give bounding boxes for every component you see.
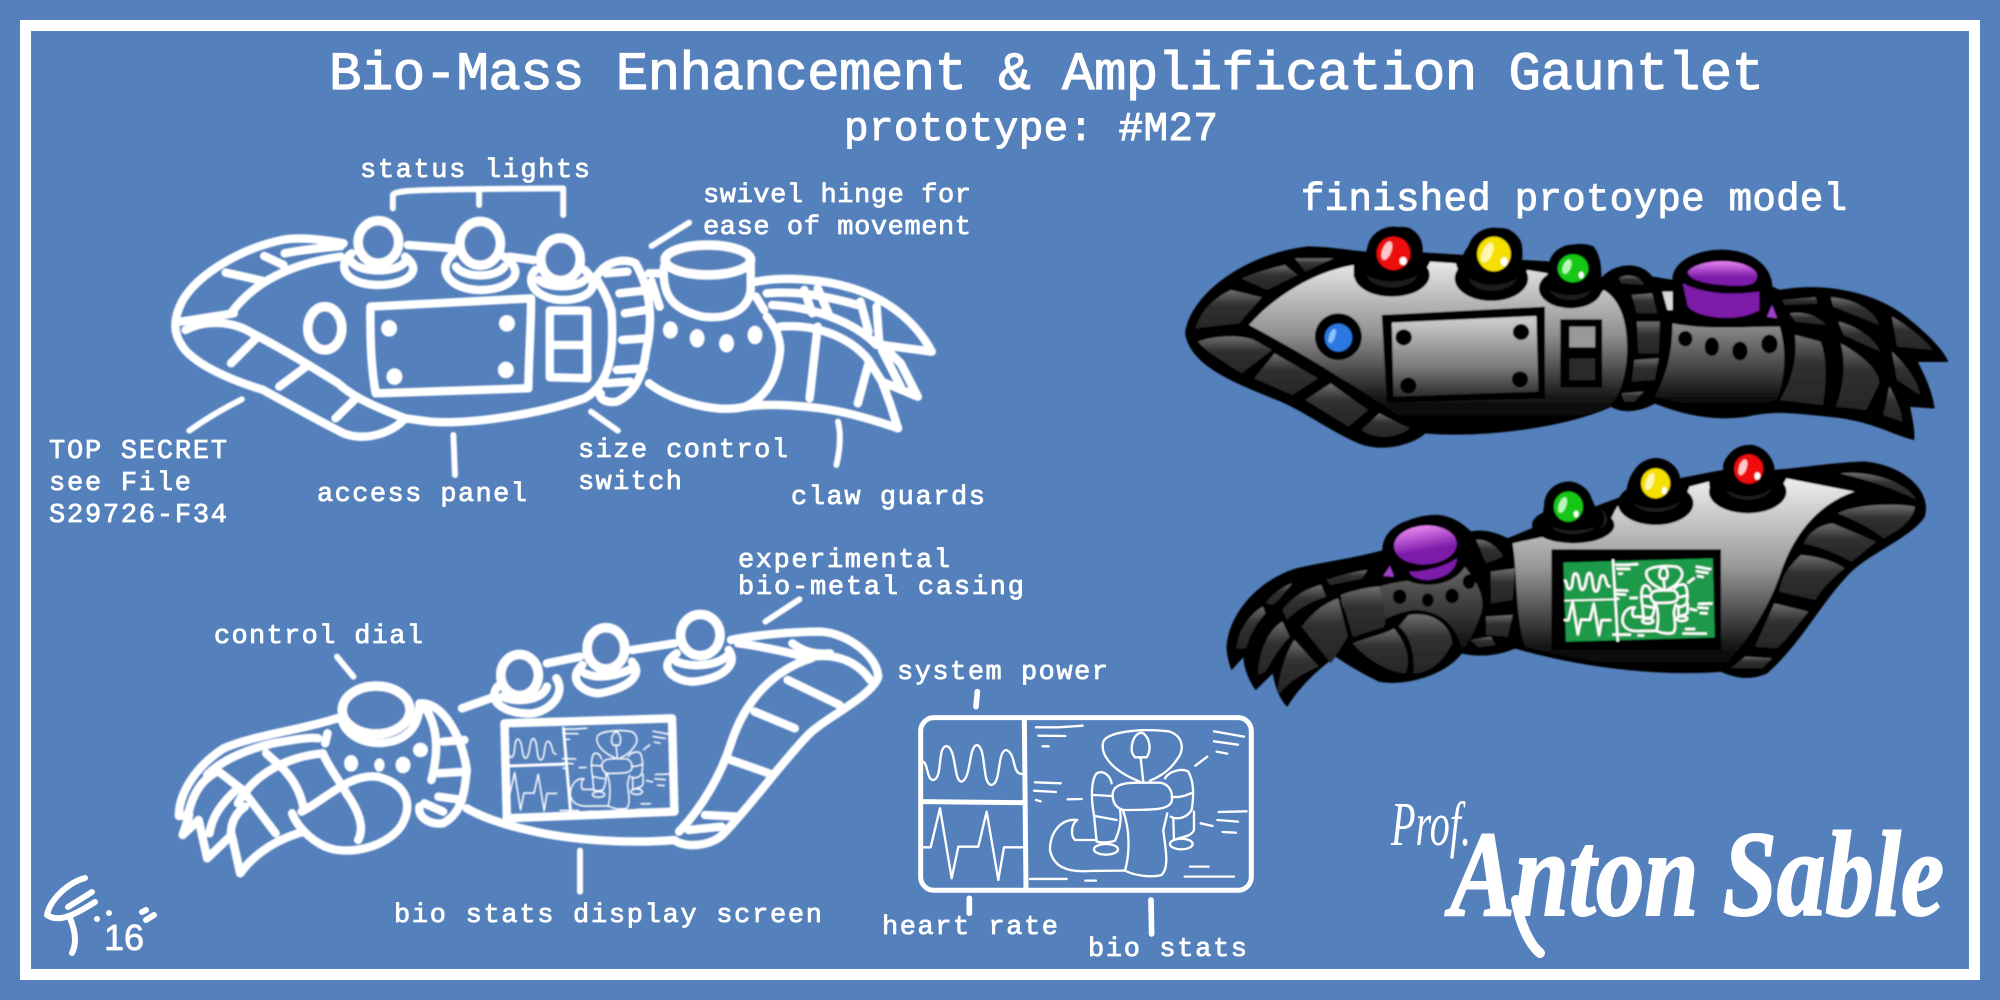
green light xyxy=(1558,254,1588,282)
light bases xyxy=(1532,445,1786,543)
artist mark '16: 16 xyxy=(104,917,144,958)
label: size control switch xyxy=(578,436,788,498)
yellow light xyxy=(1477,237,1511,271)
label: status lights: status lights xyxy=(360,156,590,186)
black silhouette xyxy=(1185,227,1948,447)
casing outline xyxy=(462,632,878,845)
bio stats screen xyxy=(504,718,674,818)
status light 2 xyxy=(576,628,636,693)
metal body xyxy=(1249,262,1627,432)
label: swivel hinge: swivel hinge for xyxy=(703,181,971,211)
status light 3 xyxy=(531,238,593,300)
forearm and fist xyxy=(1341,563,1482,673)
purple control dial xyxy=(1372,512,1479,591)
label: size control switch: size control xyxy=(578,436,788,466)
claw guards xyxy=(179,718,346,873)
claw plates xyxy=(1236,570,1385,693)
access panel xyxy=(370,298,531,393)
status light 3 xyxy=(667,614,732,682)
label: top secret: see File xyxy=(49,469,191,499)
metal body xyxy=(1513,478,1854,669)
screen detail diagram xyxy=(921,692,1251,934)
size control switch xyxy=(550,311,587,378)
leaders xyxy=(969,692,1152,934)
label: bio-metal casing: experimental xyxy=(738,546,950,576)
heading: finished prototype model: finished protoype model xyxy=(1301,178,1847,222)
leader lines xyxy=(189,188,840,475)
round port xyxy=(308,307,342,350)
label: bio stats: bio stats xyxy=(1088,935,1247,965)
label: top secret: TOP SECRET xyxy=(49,437,227,467)
artist mark '16 xyxy=(47,878,154,958)
control dial xyxy=(664,245,751,317)
purple control dial xyxy=(1673,250,1777,326)
blueprint sketch: gauntlet side B xyxy=(179,599,878,892)
signature: Prof. Anton Sable: Prof. xyxy=(1390,791,1471,859)
claw plates xyxy=(1780,297,1933,422)
yellow light xyxy=(1641,468,1670,498)
label: heart rate: heart rate xyxy=(882,913,1058,943)
access panel xyxy=(1382,307,1545,403)
dial dots xyxy=(344,743,428,773)
label: swivel hinge xyxy=(703,181,971,243)
status light 1 xyxy=(344,221,413,285)
tail armour plates xyxy=(1731,473,1916,668)
tail band dividers xyxy=(180,246,354,418)
blueprint sketch: gauntlet side A xyxy=(175,188,932,475)
fist guard xyxy=(292,776,407,851)
hinge ring xyxy=(419,703,467,824)
control dial xyxy=(342,686,420,743)
label: system power: system power xyxy=(897,658,1108,688)
green screen xyxy=(1551,549,1721,650)
casing top line xyxy=(408,245,534,260)
label: bio-metal casing xyxy=(738,546,1024,603)
claw guards xyxy=(745,279,932,428)
forearm xyxy=(649,317,780,409)
label: control dial: control dial xyxy=(214,622,423,652)
signature: Prof. Anton Sable xyxy=(1390,791,1944,953)
hinge ring plates xyxy=(1470,540,1515,647)
screen dividers xyxy=(922,718,1026,889)
subtitle: prototype: #M27 xyxy=(844,107,1218,153)
swivel hinge ring xyxy=(595,261,662,402)
label: size control switch: switch xyxy=(578,468,682,498)
label: bio-metal casing: bio-metal casing xyxy=(738,573,1024,603)
label: swivel hinge: ease of movement xyxy=(703,213,971,243)
blue light xyxy=(1315,313,1362,360)
status light 2 xyxy=(445,221,515,290)
label: top secret xyxy=(49,437,227,531)
light bases xyxy=(1354,227,1602,308)
bio stats drawing and graphs xyxy=(923,726,1247,881)
finished model: bottom gauntlet xyxy=(1227,445,1926,707)
screen frame xyxy=(921,718,1251,890)
label: claw guards: claw guards xyxy=(791,483,985,513)
label: top secret: S29726-F34 xyxy=(49,501,227,531)
red light xyxy=(1734,454,1763,484)
green light xyxy=(1554,492,1583,522)
red light xyxy=(1377,237,1410,270)
leader lines xyxy=(337,599,799,892)
status light 1 xyxy=(494,654,559,713)
hinge ring plates xyxy=(1619,276,1673,402)
size switch xyxy=(1560,319,1602,388)
label: bio stats display screen: bio stats display screen xyxy=(394,901,822,931)
label: access panel: access panel xyxy=(317,480,527,510)
black silhouette xyxy=(1227,445,1926,707)
title: Bio-Mass Enhancement & Amplification Gauntlet xyxy=(329,45,1764,106)
tail armour plates xyxy=(1196,258,1410,437)
forearm xyxy=(1655,323,1784,407)
finished model: top gauntlet xyxy=(1185,227,1948,447)
hull outline xyxy=(175,239,612,437)
